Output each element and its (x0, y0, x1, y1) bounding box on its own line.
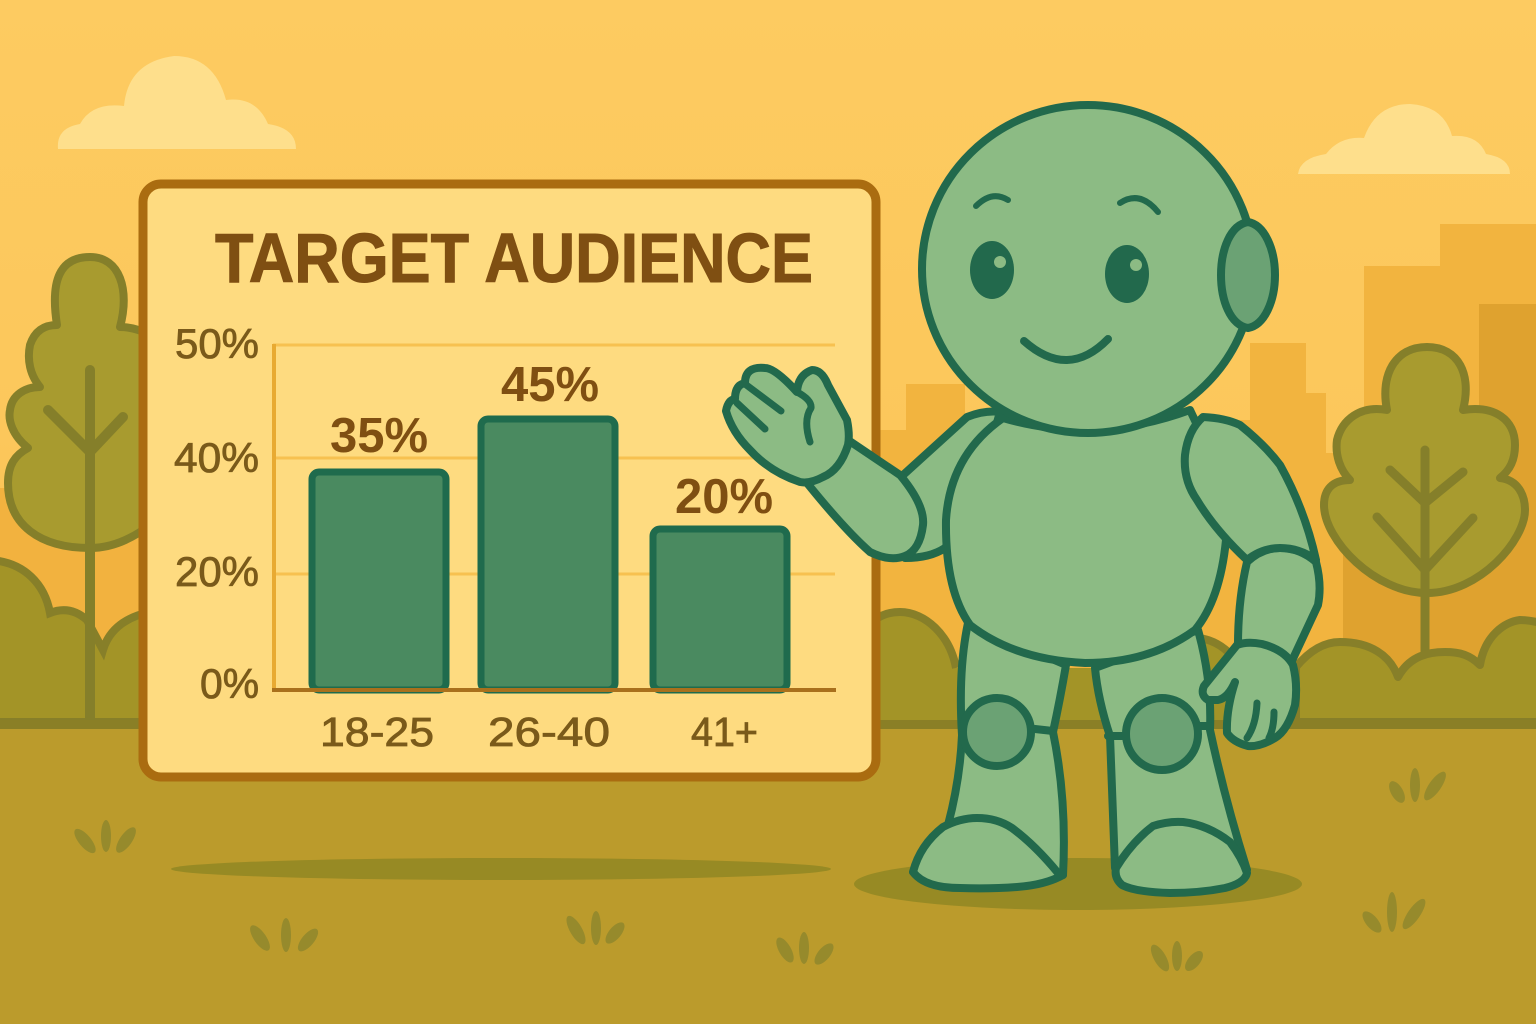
y axis labels: 40% (174, 434, 259, 481)
value labels: 35% (330, 409, 428, 463)
robot left foot (913, 818, 1063, 888)
y axis labels: 20% (175, 548, 259, 595)
gridlines and axes (273, 344, 835, 690)
y axis labels: 0% (200, 660, 259, 707)
robot raised arm (807, 440, 923, 558)
robot raised hand (726, 368, 849, 482)
bush: centre (875, 612, 1240, 722)
robot head (922, 105, 1254, 433)
sky background (0, 0, 1536, 730)
bar: 18-25 (312, 472, 446, 690)
robot upper arm (1185, 417, 1316, 560)
robot (726, 105, 1320, 893)
panel board (143, 184, 876, 777)
value labels (330, 358, 773, 524)
robot left knee (963, 698, 1031, 766)
robot torso (946, 410, 1226, 663)
value labels: 45% (501, 358, 599, 412)
cloud: right (1298, 104, 1510, 174)
robot forearm (1238, 548, 1320, 665)
title: TARGET AUDIENCE (215, 219, 813, 297)
ground (0, 729, 1536, 1024)
x axis labels (320, 709, 758, 755)
tree: right (1324, 347, 1525, 660)
city skyline (0, 224, 1536, 730)
y axis labels (174, 320, 259, 707)
bar: 26-40 (481, 419, 615, 690)
bar: 41+ (653, 529, 787, 690)
robot right leg (1095, 630, 1247, 870)
robot left eye (970, 241, 1014, 299)
robot right eye (1105, 245, 1149, 303)
value labels: 20% (675, 470, 773, 524)
baseline (272, 688, 836, 692)
tree: left (8, 257, 150, 722)
robot smile (1024, 339, 1108, 360)
panel: target audience chart (143, 184, 876, 777)
panel shadow on ground (171, 858, 831, 880)
horizon band (0, 720, 1536, 729)
robot back arm (902, 412, 1000, 558)
y axis labels: 50% (175, 320, 259, 367)
robot eyebrows (976, 196, 1158, 212)
bush: left (0, 560, 150, 722)
robot shadow on ground (854, 858, 1302, 910)
robot right foot (1116, 822, 1247, 893)
grass tufts (71, 768, 1450, 974)
robot left leg (948, 623, 1066, 875)
x axis labels: 26-40 (488, 709, 610, 755)
cloud: left (58, 56, 296, 149)
robot right knee (1126, 698, 1198, 770)
x axis labels: 18-25 (320, 709, 434, 755)
robot ear (1221, 222, 1275, 328)
robot lower hand (1203, 643, 1296, 746)
x axis labels: 41+ (691, 709, 758, 755)
bush: right (1296, 620, 1536, 722)
